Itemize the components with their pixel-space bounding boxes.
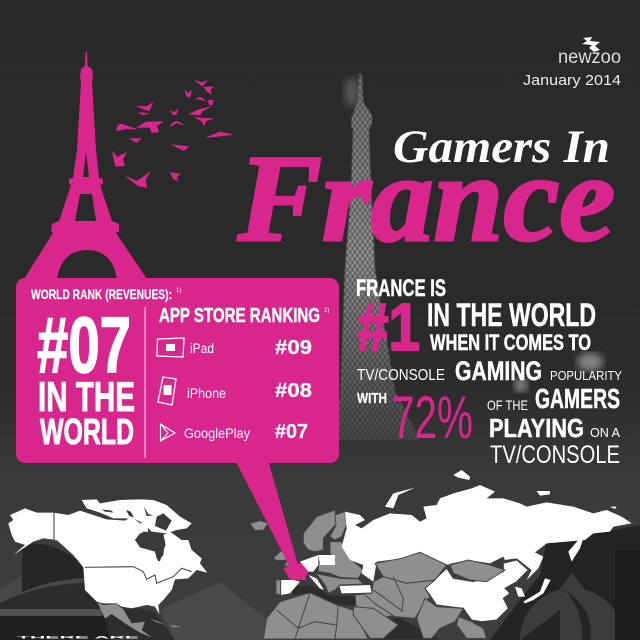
icon: Google Play xyxy=(160,424,175,441)
text block: France is #1: POPULARITY xyxy=(550,368,622,383)
label: iPad: iPad xyxy=(190,340,214,356)
text block: France is #1 xyxy=(356,275,622,469)
speech bubble panel xyxy=(16,278,339,463)
text block: France is #1: GAMING xyxy=(455,356,542,386)
rank: iPhone: #08 xyxy=(275,380,312,402)
map: France highlighted xyxy=(283,563,308,580)
divider xyxy=(144,307,146,458)
big stat: #07 in the world: IN THE xyxy=(38,373,135,420)
text block: France is #1: TV/CONSOLE xyxy=(357,367,445,384)
rank: GooglePlay: #07 xyxy=(275,421,308,443)
photo: Eiffel tower in grey xyxy=(300,74,603,440)
footnote 1: 1) xyxy=(176,288,181,294)
map: Mediterranean and oceans shade xyxy=(290,585,440,639)
text block: France is #1: WITH xyxy=(357,390,387,407)
cut-off heading at bottom: THERE ARE xyxy=(17,634,141,640)
icon: iPad xyxy=(157,338,184,357)
title: France: France xyxy=(237,130,615,267)
big stat: #07 in the world: #07 xyxy=(37,300,131,389)
map: Asia xyxy=(342,470,632,638)
icon: newzoo mark xyxy=(582,37,600,52)
photo: building lower left xyxy=(0,544,270,640)
photo: monument lower right xyxy=(490,525,640,640)
text block: France is #1: PLAYING xyxy=(489,413,584,443)
text block: France is #1: WHEN IT COMES TO xyxy=(430,330,591,355)
big stat: #07 in the world xyxy=(37,300,135,452)
text block: France is #1: FRANCE IS xyxy=(356,275,446,302)
text block: France is #1: OF THE xyxy=(487,397,528,413)
map: Europe, Middle East and Africa xyxy=(250,510,397,639)
text block: France is #1: 72% xyxy=(392,384,473,451)
date: January 2014 xyxy=(523,72,621,89)
map: North America xyxy=(8,499,207,637)
newzoo wordmark: newzoo xyxy=(558,47,621,68)
rank: iPad: #09 xyxy=(275,337,312,359)
logo: newzoo xyxy=(558,37,621,68)
label: iPhone: iPhone xyxy=(187,385,226,401)
icon: pink Eiffel tower xyxy=(24,52,147,279)
birds flock xyxy=(113,81,232,187)
label: GooglePlay: GooglePlay xyxy=(184,425,250,441)
icon: iPhone xyxy=(158,377,176,405)
title: Gamers In: Gamers In xyxy=(393,121,610,173)
heading: world rank: WORLD RANK (REVENUES): xyxy=(31,287,172,302)
text block: France is #1: #1 xyxy=(357,290,420,365)
heading: app store ranking: APP STORE RANKING xyxy=(159,304,320,327)
text block: France is #1: ON A xyxy=(590,425,620,440)
map: Mexico and Central America xyxy=(97,602,152,637)
footnote 2: 2) xyxy=(324,308,329,314)
big stat: #07 in the world: WORLD xyxy=(40,411,134,452)
speech bubble tail xyxy=(235,460,300,572)
